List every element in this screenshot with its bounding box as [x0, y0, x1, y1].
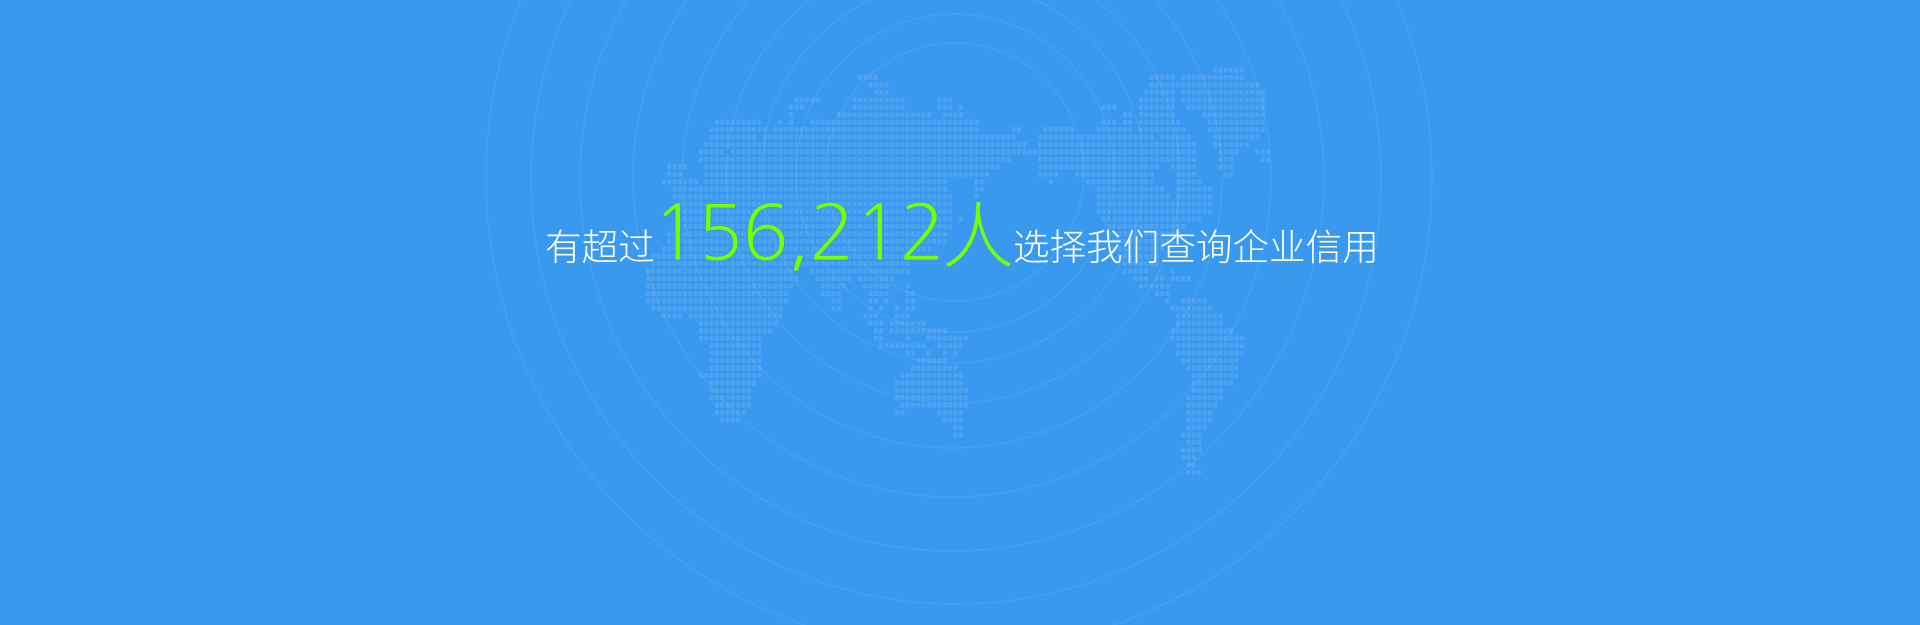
text: person character: 人 [942, 198, 1014, 278]
number: user count: 156,212 [652, 195, 944, 272]
concentric rings [486, 0, 1432, 625]
text: closing phrase: 选择我们查询企业信用 [1013, 227, 1379, 268]
text: lead-in: 有超过 [545, 227, 655, 268]
headline [545, 195, 1379, 278]
dotted world map [646, 70, 1271, 472]
